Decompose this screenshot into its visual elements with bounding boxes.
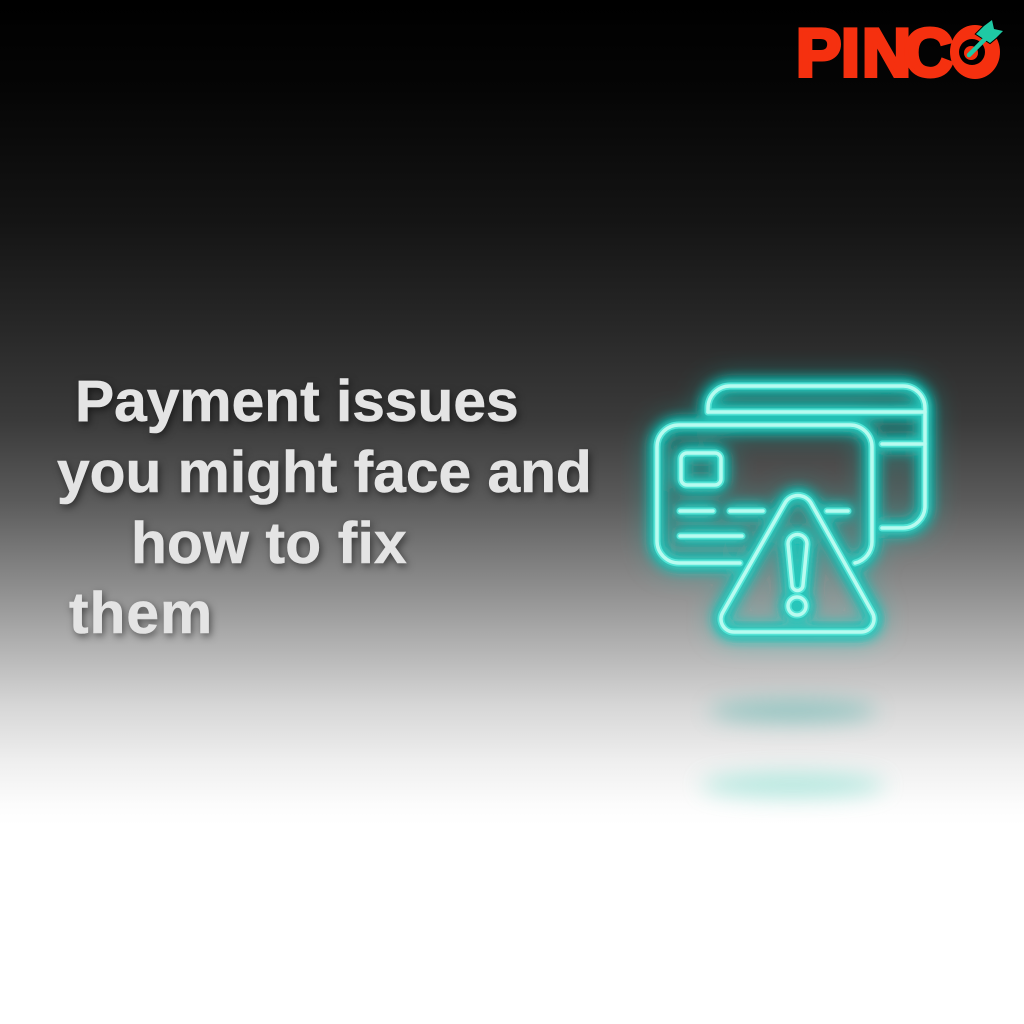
logo: arrow xyxy=(969,20,1003,55)
title line 2: you might face and xyxy=(57,440,592,505)
title line 1: Payment issues xyxy=(75,369,519,434)
reflection: upper glow xyxy=(709,700,877,722)
title line 3: how to fix xyxy=(131,511,407,576)
logo: PINCO: O xyxy=(951,19,998,86)
reflection: lower glow xyxy=(701,773,885,797)
title line 4: them xyxy=(69,581,213,646)
logo: PINCO: PINC xyxy=(796,15,953,91)
logo: target O xyxy=(950,20,1003,79)
icon: credit cards with warning triangle xyxy=(657,386,925,632)
title xyxy=(57,369,594,646)
